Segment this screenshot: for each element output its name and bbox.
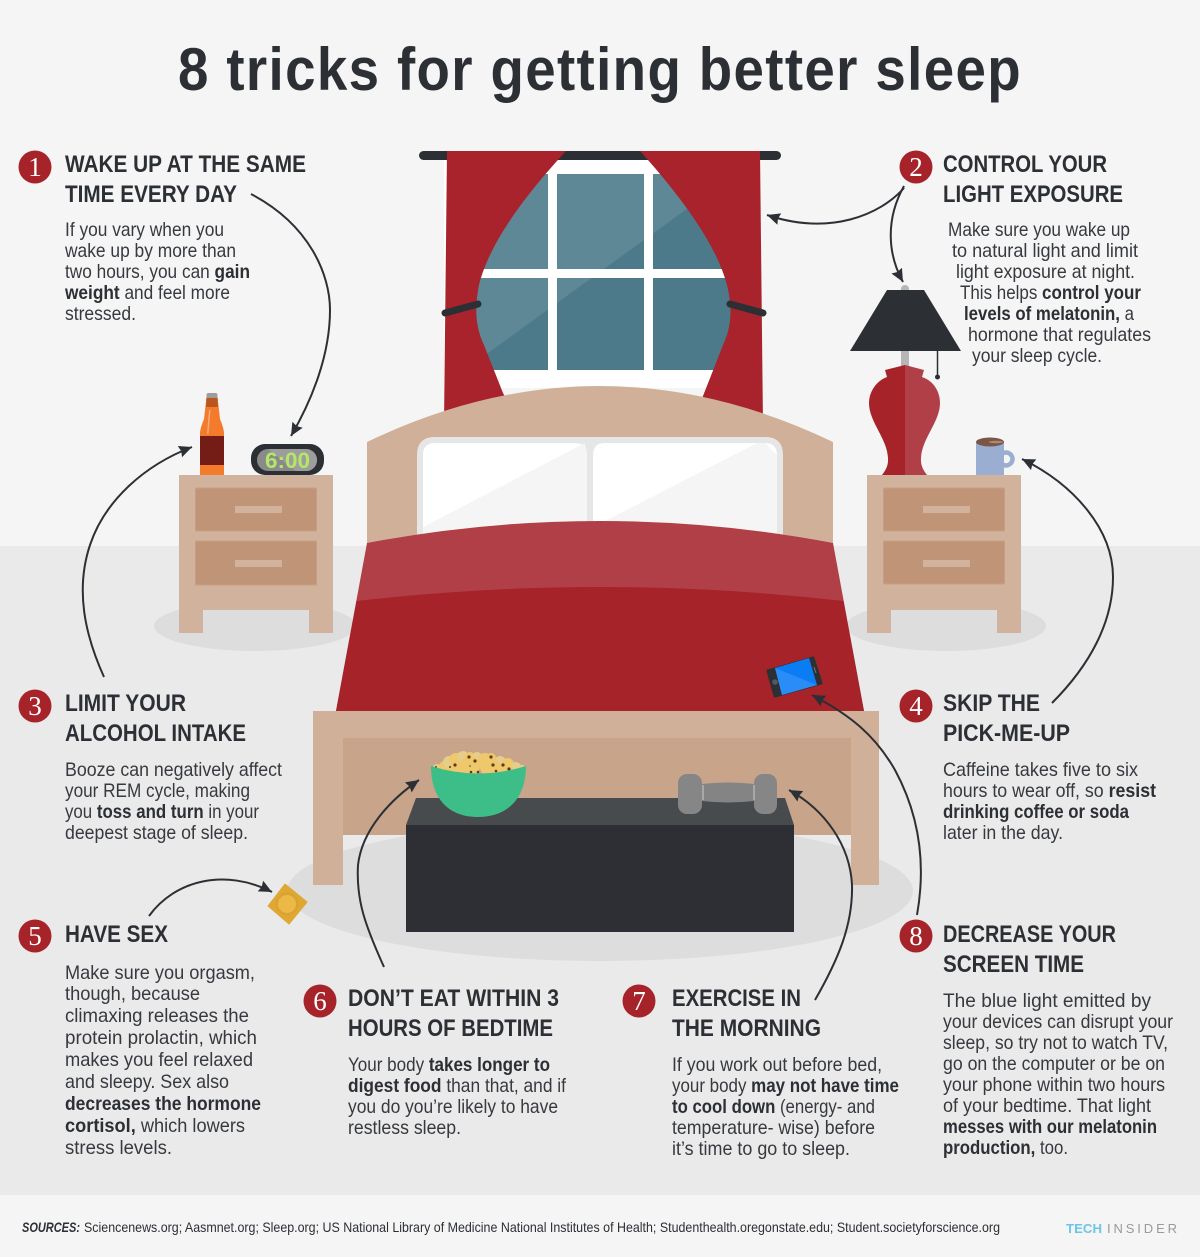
icon: alarm clock — [251, 444, 324, 475]
right curtain — [640, 151, 763, 425]
body text 4: drinking coffee or soda — [943, 801, 1129, 823]
body text 5: stress levels. — [65, 1137, 172, 1159]
body text 3: deepest stage of sleep. — [65, 822, 248, 844]
body text 8: The blue light emitted by — [943, 990, 1151, 1012]
panel: tip 4 — [900, 690, 1156, 844]
body text 7: to cool down (energy- and — [672, 1096, 875, 1118]
body text 2 — [948, 219, 1151, 367]
body text 5: makes you feel relaxed — [65, 1049, 253, 1071]
body text 6: restless sleep. — [348, 1117, 461, 1139]
logo: Tech Insider: INSIDER — [1107, 1221, 1177, 1236]
icon: alarm clock: 6:00 — [265, 448, 310, 473]
number badge 5 — [18, 920, 52, 952]
shadow: left nightstand — [154, 601, 356, 651]
body text 5: Make sure you orgasm, — [65, 962, 255, 984]
heading 7: THE MORNING — [672, 1015, 821, 1042]
body text 1: stressed. — [65, 303, 136, 325]
number badge 4: 4 — [909, 691, 923, 721]
body text 6: Your body takes longer to — [348, 1054, 550, 1076]
body text 2: light exposure at night. — [956, 261, 1135, 283]
heading 1: TIME EVERY DAY — [65, 181, 237, 208]
blanket fold — [336, 521, 864, 711]
shadow: bed rug — [287, 821, 913, 961]
heading 6: DON’T EAT WITHIN 3 — [348, 985, 559, 1012]
panel: tip 6 — [304, 984, 567, 1139]
number badge 3: 3 — [28, 691, 42, 721]
body text 4: hours to wear off, so resist — [943, 780, 1156, 802]
heading 2: LIGHT EXPOSURE — [943, 181, 1123, 208]
wall background — [0, 0, 1200, 546]
body text 7: your body may not have time — [672, 1075, 899, 1097]
panel: tip 1 — [18, 150, 306, 325]
heading 4: PICK-ME-UP — [943, 720, 1070, 747]
pillows — [417, 437, 783, 560]
panel: tip 2 — [900, 150, 1151, 367]
body text 8: your phone within two hours — [943, 1074, 1165, 1096]
headboard — [367, 386, 833, 560]
body text 5: cortisol, which lowers — [65, 1115, 245, 1137]
body text 3: Booze can negatively affect — [65, 759, 283, 781]
arrow: tip 7 to dumbbell — [789, 790, 852, 1000]
number badge 1: 1 — [28, 152, 42, 182]
window frame — [444, 160, 758, 388]
illustration: window with curtains — [419, 151, 781, 425]
body text 1: two hours, you can gain — [65, 261, 250, 283]
icon: phone — [768, 658, 821, 696]
heading 1: WAKE UP AT THE SAME — [65, 151, 306, 178]
arrow: tip 1 to clock — [251, 194, 330, 436]
title: 8 tricks for getting better sleep — [178, 36, 1022, 103]
body text 8 — [943, 990, 1173, 1159]
floor background — [0, 546, 1200, 1195]
left tieback — [445, 304, 478, 313]
right nightstand — [867, 475, 1021, 633]
heading 5: HAVE SEX — [65, 921, 168, 948]
body text 3 — [65, 759, 283, 844]
heading 6 — [348, 985, 559, 1042]
logo: Tech Insider — [1066, 1221, 1177, 1236]
panel: tip 7 — [622, 984, 899, 1160]
heading 8 — [943, 921, 1116, 978]
number badge 5: 5 — [28, 921, 42, 951]
panel: tip 8 — [900, 920, 1173, 1159]
heading 4 — [943, 690, 1070, 747]
body text 4: Caffeine takes five to six — [943, 759, 1138, 781]
body text 1 — [64, 219, 250, 325]
body text 8: messes with our melatonin — [943, 1116, 1157, 1138]
number badge 7: 7 — [632, 986, 646, 1016]
number badge 7 — [622, 984, 656, 1018]
icon: lamp — [850, 285, 961, 475]
body text 8: your devices can disrupt your — [943, 1011, 1173, 1033]
number badge 3 — [18, 690, 52, 722]
body text 4 — [943, 759, 1156, 844]
number badge 2 — [900, 150, 932, 184]
heading 6: HOURS OF BEDTIME — [348, 1015, 553, 1042]
heading 3: LIMIT YOUR — [65, 690, 186, 717]
icon: condom wrapper — [268, 884, 307, 924]
number badge 2: 2 — [909, 152, 923, 182]
heading 7 — [672, 985, 821, 1042]
icon: bowl of food — [431, 751, 526, 817]
body text 5: climaxing releases the — [65, 1005, 249, 1027]
body text 2: hormone that regulates — [968, 324, 1151, 346]
body text 2: levels of melatonin, a — [964, 303, 1134, 325]
body text 3: your REM cycle, making — [65, 780, 250, 802]
bench — [406, 798, 794, 932]
arrow: tip 3 to bottle — [83, 447, 192, 677]
body text 6 — [348, 1054, 567, 1139]
body text 4: later in the day. — [943, 822, 1063, 844]
body text 2: Make sure you wake up — [948, 219, 1130, 241]
logo: Tech Insider: TECH — [1066, 1221, 1102, 1236]
body text 2: to natural light and limit — [952, 240, 1139, 262]
arrow: tip 8 to phone — [812, 695, 921, 915]
blanket — [336, 587, 864, 711]
body text 5: protein prolactin, which — [65, 1027, 257, 1049]
body text 8: sleep, so try not to watch TV, — [943, 1032, 1168, 1054]
body text 7: temperature- wise) before — [672, 1117, 875, 1139]
body text 6: you do you’re likely to have — [348, 1096, 558, 1118]
left nightstand — [179, 475, 333, 633]
body text 1: weight and feel more — [64, 282, 230, 304]
heading 3 — [65, 690, 246, 747]
body text 1: wake up by more than — [64, 240, 236, 262]
heading 3: ALCOHOL INTAKE — [65, 720, 246, 747]
heading 1 — [65, 151, 306, 208]
body text 7: If you work out before bed, — [672, 1054, 882, 1076]
curtain rod — [419, 151, 781, 160]
sources footer text: SOURCES: — [22, 1219, 80, 1235]
number badge 8: 8 — [909, 921, 923, 951]
heading 2 — [943, 151, 1123, 208]
arrow: tip 6 to bowl — [358, 780, 419, 967]
body text 5: decreases the hormone — [65, 1093, 261, 1115]
window panes — [470, 174, 735, 370]
body text 3: you toss and turn in your — [65, 801, 259, 823]
number badge 6 — [304, 984, 336, 1018]
arrow: tip 2 to curtains — [767, 188, 904, 224]
body text 5 — [65, 962, 261, 1159]
icon: coffee mug — [976, 438, 1012, 475]
body text 5: though, because — [65, 983, 200, 1005]
body text 6: digest food than that, and if — [348, 1075, 567, 1097]
icon: dumbbell — [678, 774, 777, 814]
body text 2: This helps control your — [960, 282, 1141, 304]
body text 2: your sleep cycle. — [972, 345, 1102, 367]
footboard — [313, 711, 879, 885]
right tieback — [730, 304, 763, 313]
body text 5: and sleepy. Sex also — [65, 1071, 229, 1093]
heading 2: CONTROL YOUR — [943, 151, 1107, 178]
illustration: bed — [313, 386, 879, 885]
arrow: tip 4 to mug — [1022, 459, 1113, 703]
icon: beer bottle — [200, 393, 224, 475]
body text 8: of your bedtime. That light — [943, 1095, 1152, 1117]
body text 7: it’s time to go to sleep. — [672, 1138, 850, 1160]
body text 1: If you vary when you — [65, 219, 224, 241]
number badge 1 — [18, 150, 52, 184]
panel: tip 3 — [18, 690, 283, 844]
heading 8: DECREASE YOUR — [943, 921, 1116, 948]
footboard panel — [343, 738, 851, 835]
panel: tip 5 — [18, 920, 261, 1159]
sources footer text: Sciencenews.org; Aasmnet.org; Sleep.org; US National Library of Medicine National Institutes of Health; Studenthealth.oregonstate.edu; Student.societyforscience.org — [84, 1219, 1000, 1235]
body text 8: production, too. — [943, 1137, 1068, 1159]
number badge 4 — [900, 690, 932, 722]
heading 4: SKIP THE — [943, 690, 1040, 717]
footer band — [0, 1195, 1200, 1257]
arrow: tip 5 to condom — [149, 880, 272, 916]
number badge 6: 6 — [313, 986, 327, 1016]
heading 7: EXERCISE IN — [672, 985, 801, 1012]
heading 8: SCREEN TIME — [943, 951, 1084, 978]
body text 7 — [672, 1054, 899, 1160]
number badge 8 — [900, 920, 932, 952]
body text 8: go on the computer or be on — [943, 1053, 1165, 1075]
shadow: right nightstand — [846, 601, 1046, 651]
arrow: tip 2 to lamp — [891, 186, 904, 282]
left curtain — [444, 151, 566, 425]
